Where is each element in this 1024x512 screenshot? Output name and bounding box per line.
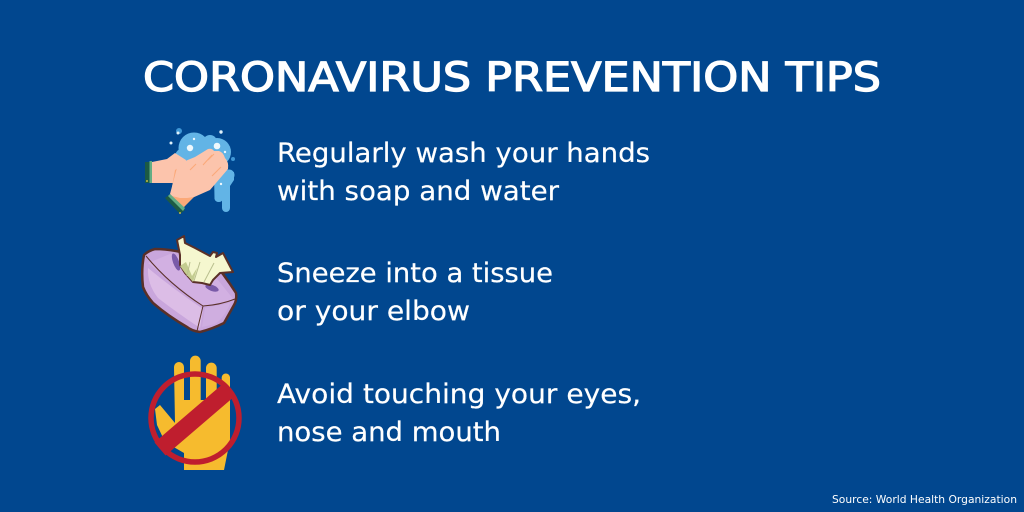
title: CORONAVIRUS PREVENTION TIPS: [143, 55, 881, 101]
icon: no touching hand: [151, 356, 239, 470]
text: avoid touching: nose and mouth: [277, 417, 501, 448]
text: avoid touching: [277, 379, 641, 448]
text: wash hands: with soap and water: [277, 176, 559, 207]
right hand: [170, 149, 228, 208]
text: wash hands: [277, 138, 650, 207]
hand: [155, 356, 230, 470]
left hand: [152, 153, 186, 183]
soap foam: [174, 132, 234, 212]
prohibition sign: [151, 374, 239, 462]
icon: tissue box: [142, 236, 236, 332]
text: wash hands: Regularly wash your hands: [277, 138, 650, 169]
text: sneeze: Sneeze into a tissue: [277, 258, 553, 289]
text: sneeze: or your elbow: [277, 296, 470, 327]
text: sneeze: [277, 258, 553, 327]
tissue: [177, 236, 233, 285]
text: avoid touching: Avoid touching your eyes,: [277, 379, 641, 410]
icon: washing hands: [145, 128, 235, 214]
source note: Source: World Health Organization: [832, 494, 1017, 506]
